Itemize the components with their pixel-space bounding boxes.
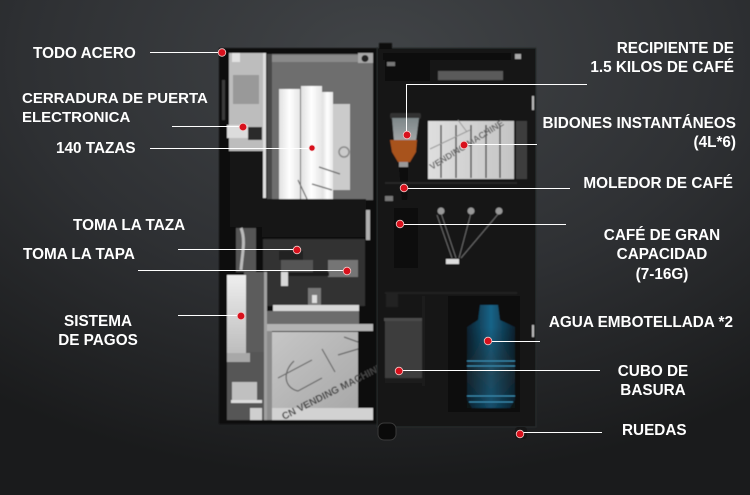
- shelf: [385, 182, 517, 184]
- bars: [273, 305, 359, 311]
- label: cafe de gran capacidad: CAPACIDAD: [617, 246, 707, 263]
- label: 140 tazas: 140 TAZAS: [56, 140, 136, 157]
- label: recipiente de cafe: RECIPIENTE DE: [617, 40, 734, 57]
- waste panel: [272, 332, 358, 409]
- label: cafe de gran capacidad: (7-16G): [636, 266, 688, 283]
- icon: water bottle: [448, 296, 520, 412]
- grinder module: [385, 196, 418, 268]
- label: toma la taza: TOMA LA TAZA: [73, 217, 185, 234]
- leader lines: [138, 52, 602, 432]
- black control box: [230, 151, 263, 227]
- cup holder plate: [331, 104, 350, 190]
- label: bidones instantaneos: BIDONES INSTANTÁNEOS: [542, 115, 736, 132]
- marker dots: [218, 49, 524, 438]
- icon: front wheel: [378, 423, 396, 440]
- icon: powder canisters: VENDING MACHINE: [428, 118, 506, 172]
- upper chamber: [267, 54, 373, 200]
- black dispenser box: [262, 199, 366, 237]
- label: cafe de gran capacidad: CAFÉ DE GRAN: [604, 227, 720, 244]
- label: cerradura de puerta electronica: ELECTRONICA: [22, 109, 130, 126]
- icon: powder canisters: [428, 118, 527, 179]
- logo watermark: [278, 337, 386, 423]
- upper left column: [227, 53, 266, 198]
- panel: right door: [377, 43, 536, 427]
- label: toma la tapa: TOMA LA TAPA: [23, 246, 135, 263]
- panel: left cabinet: [219, 48, 386, 424]
- label: bidones instantaneos: (4L*6): [694, 134, 736, 151]
- label: cerradura de puerta electronica: CERRADURA DE PUERTA: [22, 90, 208, 107]
- label: recipiente de cafe: 1.5 KILOS DE CAFÉ: [590, 59, 734, 76]
- label: todo acero: TODO ACERO: [33, 45, 136, 62]
- label: sistema de pagos: DE PAGOS: [58, 332, 138, 349]
- label: sistema de pagos: SISTEMA: [64, 313, 132, 330]
- lid chamber: [263, 239, 365, 306]
- shelf: [385, 292, 517, 294]
- label: cubo de basura: CUBO DE: [618, 363, 688, 380]
- cup take area: [236, 228, 256, 272]
- label: ruedas: RUEDAS: [622, 422, 687, 439]
- label: moledor de cafe: MOLEDOR DE CAFÉ: [583, 175, 733, 192]
- icon: cup stacks: [279, 86, 340, 199]
- label: cubo de basura: BASURA: [620, 382, 686, 399]
- icon: mixer tubes: [427, 208, 503, 292]
- icon: coffee hopper: [390, 113, 421, 200]
- logo watermark: CN VENDING MACHINE: [280, 362, 386, 423]
- icon: rear wheel: [515, 427, 527, 439]
- label: agua embotellada: AGUA EMBOTELLADA *2: [549, 314, 733, 331]
- payment system: [227, 272, 267, 420]
- waste bin: [384, 293, 425, 386]
